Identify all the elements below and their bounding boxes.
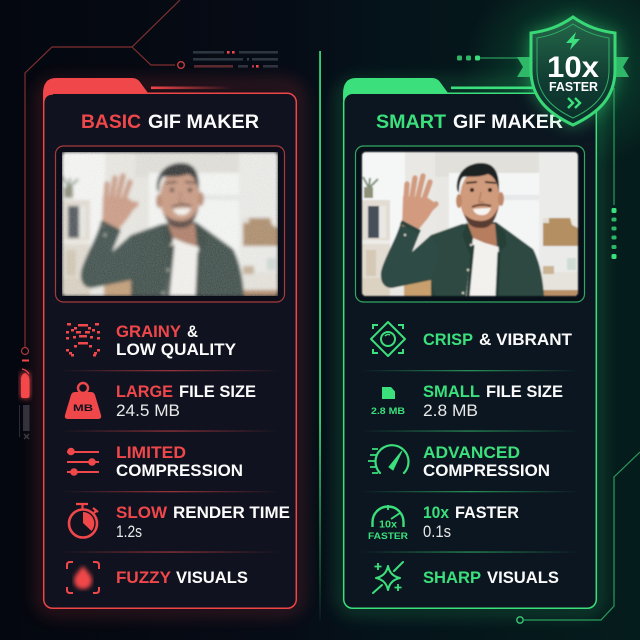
badge: 10x faster shield: FASTER (549, 80, 598, 94)
text: slow render time: SLOW (116, 504, 167, 522)
text: sharp visuals: VISUALS (487, 569, 559, 587)
green dots right (612, 208, 616, 259)
icon: MB weight: MB (73, 403, 93, 414)
text: sharp visuals (423, 569, 559, 587)
text: slow render time: RENDER TIME (173, 504, 290, 522)
text: small file size: FILE SIZE (486, 383, 563, 401)
icon: sparkle (373, 562, 403, 593)
icon: small file (371, 387, 406, 416)
text: 10x faster: 10x (423, 504, 450, 522)
text: 10x faster: 0.1s (423, 523, 451, 541)
badge: 10x faster shield: 10x (547, 51, 599, 84)
panel: smart gif maker (343, 78, 597, 609)
right circuit decoration (480, 58, 640, 623)
text: 10x faster (423, 504, 519, 541)
text: 10x faster: FASTER (455, 504, 519, 522)
icon: pixelated sad face (66, 323, 100, 356)
shield body (531, 17, 615, 125)
text: small file size (423, 383, 563, 420)
icon: 10x faster gauge: 10x (379, 520, 397, 530)
text: advanced compression: COMPRESSION (423, 462, 550, 480)
text: sharp visuals: SHARP (423, 569, 481, 587)
icon: stopwatch (69, 504, 98, 538)
icon: fuzzy focus (67, 562, 99, 593)
heading: smart gif maker: SMART (376, 111, 446, 133)
heading: smart gif maker (376, 111, 563, 133)
text: limited compression: LIMITED (116, 444, 186, 462)
text: large file size: FILE SIZE (179, 383, 256, 401)
center divider line (319, 51, 321, 621)
text: grainy and low quality (116, 323, 236, 359)
dividers (360, 370, 580, 553)
left circuit decoration (25, 0, 184, 347)
text: crisp and vibrant: CRISP (423, 331, 473, 349)
bolt (566, 32, 580, 50)
text: crisp and vibrant: & VIBRANT (479, 331, 572, 349)
text: slow render time: 1.2s (116, 523, 142, 541)
icon: 10x faster gauge: FASTER (368, 531, 408, 542)
text: crisp and vibrant (423, 331, 572, 349)
text: large file size: LARGE (116, 383, 173, 401)
text: fuzzy visuals (116, 569, 248, 587)
icon: MB weight (65, 383, 101, 419)
icon: speed gauge (368, 445, 409, 473)
text: small file size: SMALL (423, 383, 480, 401)
text: grainy and low quality: LOW QUALITY (116, 341, 236, 359)
photo: crisp man waving (356, 146, 584, 302)
left side indicator (19, 348, 30, 439)
chevrons (568, 98, 580, 108)
green dots top (457, 56, 480, 60)
text: advanced compression: ADVANCED (423, 444, 520, 462)
text: slow render time (116, 504, 290, 541)
icon: sliders (67, 448, 99, 476)
text: small file size: 2.8 MB (423, 402, 478, 420)
text: large file size: 24.5 MB (116, 402, 180, 420)
icon: crisp lens diamond (371, 322, 405, 356)
photo: grainy man waving (56, 146, 284, 302)
text: grainy and low quality: & (187, 323, 198, 341)
icon: 10x faster gauge (368, 505, 408, 542)
icon: small file: 2.8 MB (371, 406, 406, 416)
dividers (60, 370, 280, 553)
text: large file size (116, 383, 256, 420)
text: limited compression (116, 444, 243, 480)
ribbon (517, 57, 629, 77)
panel: basic gif maker (43, 78, 297, 609)
text: grainy and low quality: GRAINY (116, 323, 181, 341)
heading: smart gif maker: GIF MAKER (453, 111, 563, 133)
status dashes (193, 51, 278, 68)
text: limited compression: COMPRESSION (116, 462, 243, 480)
heading: basic gif maker: BASIC (81, 111, 141, 133)
heading: basic gif maker (81, 111, 259, 133)
badge: 10x faster shield (517, 16, 629, 126)
text: fuzzy visuals: VISUALS (176, 569, 248, 587)
heading: basic gif maker: GIF MAKER (148, 111, 259, 133)
text: advanced compression (423, 444, 550, 480)
text: fuzzy visuals: FUZZY (116, 569, 171, 587)
